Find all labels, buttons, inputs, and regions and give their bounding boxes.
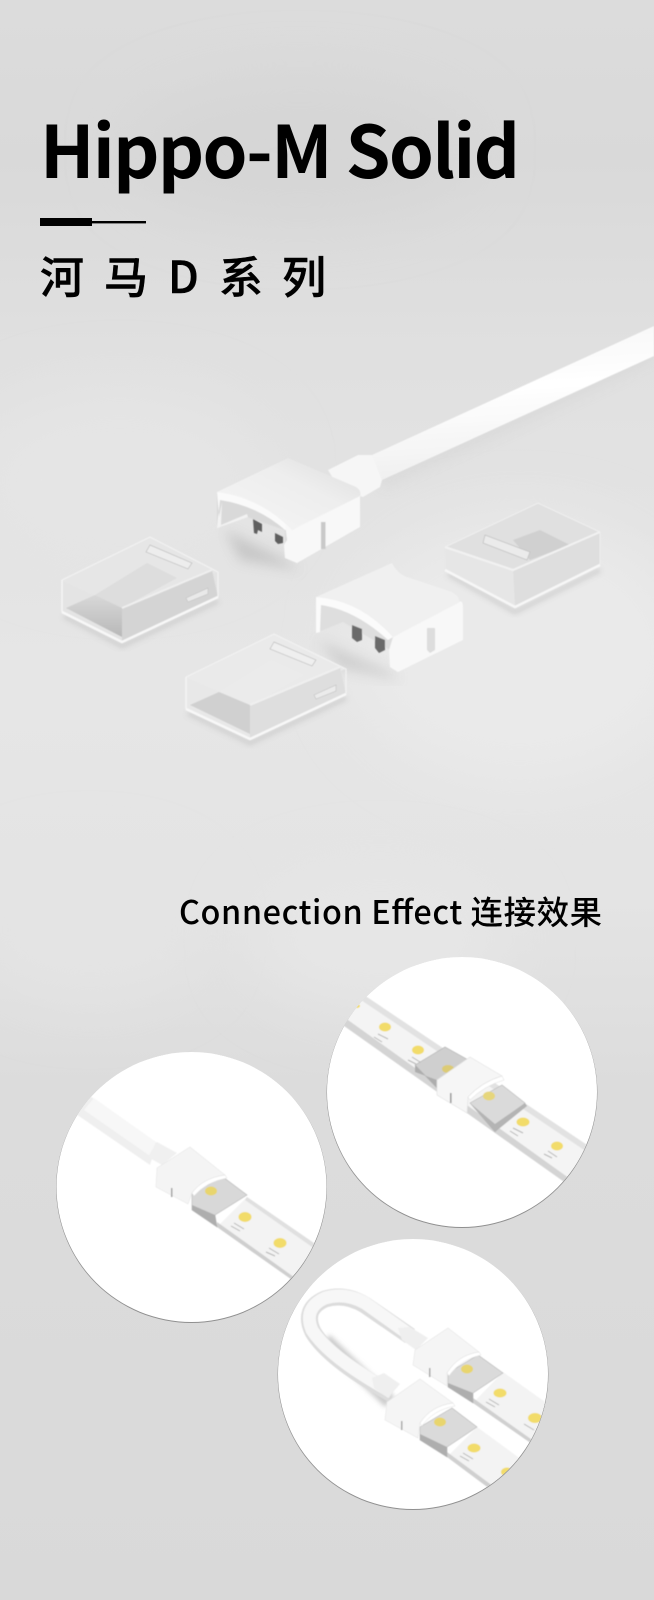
cable — [372, 326, 654, 480]
pins — [352, 625, 385, 653]
product: clear cap right — [445, 503, 600, 612]
connector upper — [413, 1328, 479, 1386]
subtitle: 河马D系列 — [40, 242, 326, 306]
title divider rule — [40, 218, 146, 226]
connector — [156, 1147, 225, 1204]
title: Hippo-M Solid — [40, 94, 520, 199]
clear cap upper — [448, 1355, 503, 1403]
LED strip — [348, 1002, 584, 1176]
connector side — [284, 496, 360, 563]
connector arch rim — [217, 492, 292, 530]
connector top face — [217, 458, 360, 530]
U cable — [309, 1297, 410, 1394]
clear cap left — [414, 1046, 467, 1080]
product: small white connector — [316, 563, 463, 680]
product: clear cap left — [62, 537, 218, 646]
arch rim — [316, 597, 393, 640]
connector — [437, 1057, 502, 1113]
product: clear cap front — [186, 634, 346, 743]
connector lower — [385, 1379, 453, 1438]
circle: strip to strip connection — [327, 957, 602, 1228]
circle: U-shaped jumper connection — [278, 1239, 562, 1510]
section heading: Connection Effect 连接效果 — [179, 887, 602, 934]
LEDs — [354, 1004, 563, 1150]
top face — [316, 563, 459, 637]
connector inner wall — [217, 492, 300, 562]
clear cap — [192, 1177, 247, 1227]
slot — [427, 628, 435, 653]
LED strips — [477, 1373, 545, 1440]
clear cap lower — [420, 1408, 477, 1457]
LED strip — [221, 1200, 312, 1276]
LEDs — [468, 1388, 542, 1476]
cable — [78, 1097, 152, 1164]
cable collar — [328, 455, 382, 497]
connector slot — [321, 522, 326, 549]
window — [483, 535, 530, 560]
circle: cable to strip connection — [56, 1052, 327, 1323]
product: white connector with cable — [217, 326, 654, 570]
connector pins — [253, 519, 283, 544]
LEDs — [238, 1212, 286, 1248]
clear cap right — [470, 1084, 526, 1124]
jumper shadow — [325, 1340, 390, 1402]
side — [389, 601, 463, 672]
inner wall — [316, 590, 405, 672]
